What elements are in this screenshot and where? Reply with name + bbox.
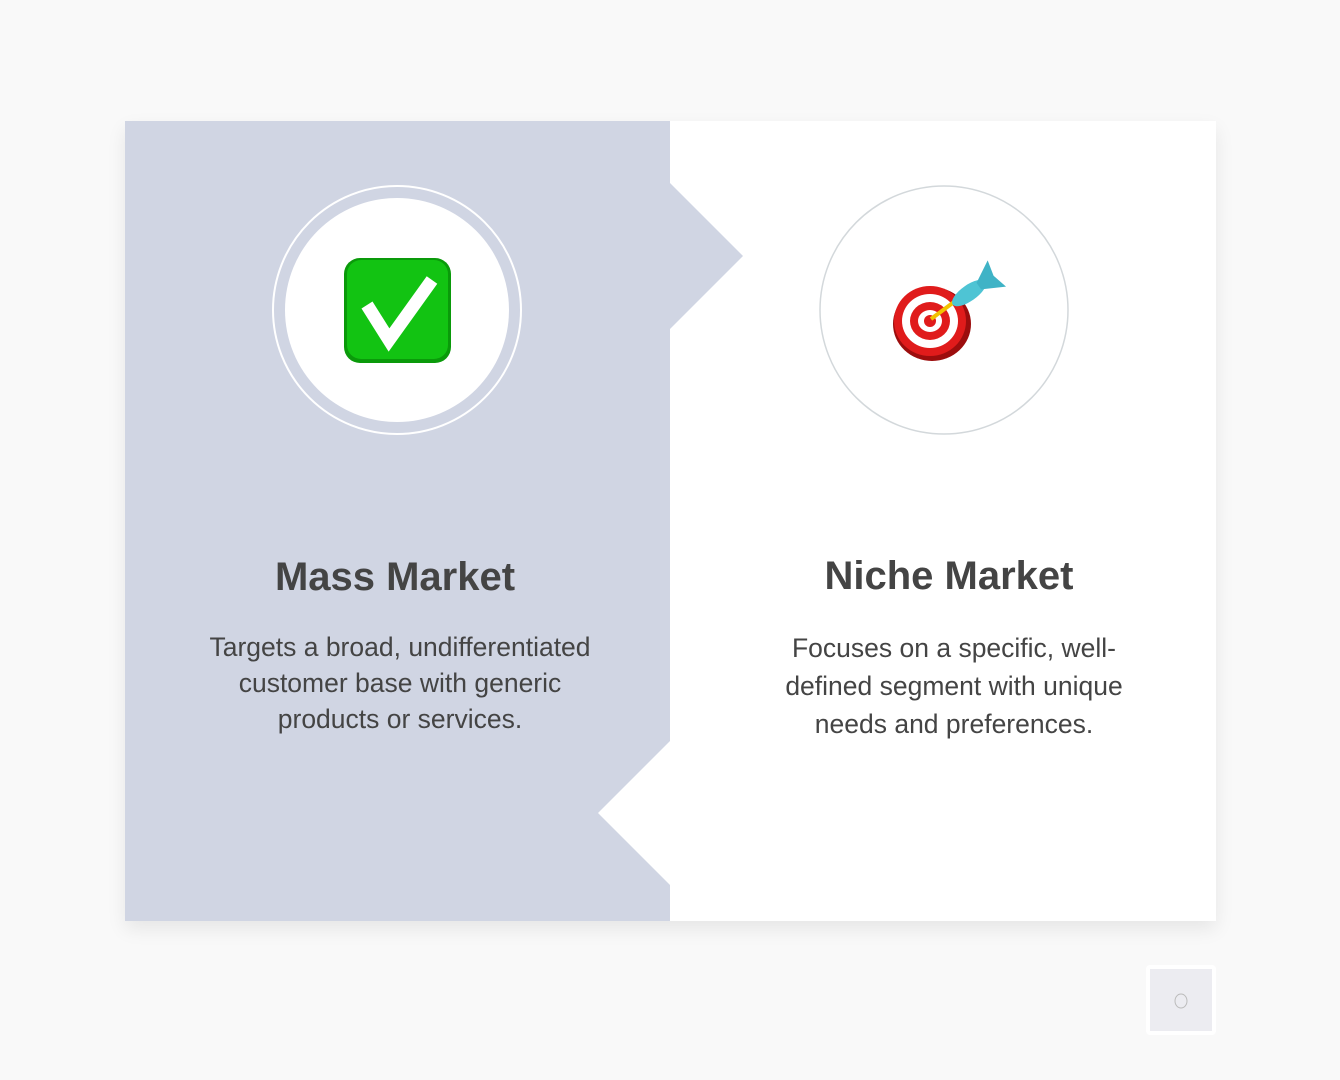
text: niche market description: needs and preferences.: [815, 709, 1093, 739]
text: mass market description: [209, 632, 591, 734]
heading: mass market: Mass Market: [275, 555, 515, 599]
panel: card: [125, 121, 1216, 921]
text: mass market description: Targets a broad, undifferentiated: [209, 632, 591, 662]
icon: watermark box: [1146, 965, 1216, 1035]
icon: niche market circle: [819, 185, 1069, 435]
text: mass market description: products or services.: [278, 704, 522, 734]
panel: mass market background: [125, 121, 743, 921]
heading: niche market: Niche Market: [824, 554, 1073, 598]
text: niche market description: Focuses on a specific, well-: [792, 633, 1116, 663]
text: mass market description: customer base with generic: [239, 668, 561, 698]
icon: mass market circle: [272, 185, 522, 435]
text: niche market description: [785, 633, 1123, 739]
text: niche market description: defined segment with unique: [785, 671, 1123, 701]
